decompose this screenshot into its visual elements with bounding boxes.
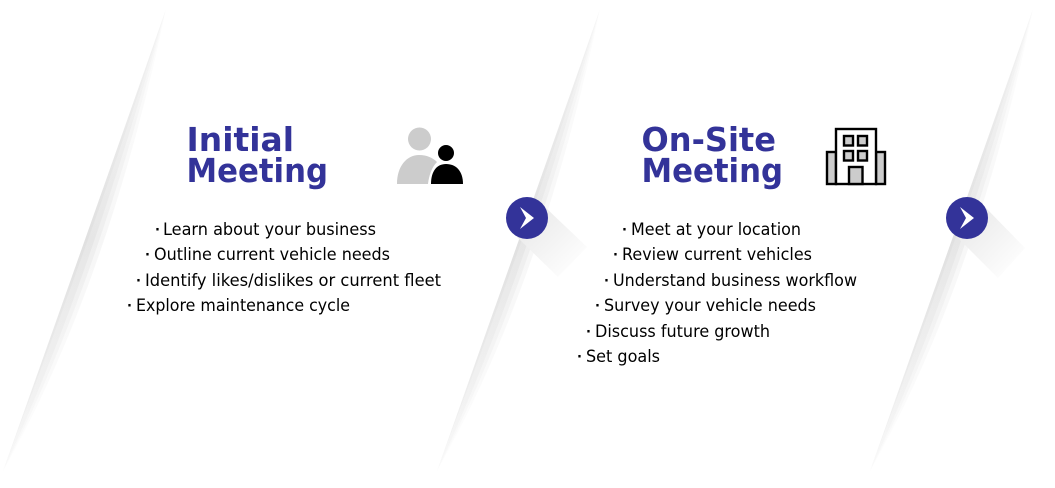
- list item: Review current vehicles: ·: [613, 248, 618, 263]
- list: Initial Meeting tasks: [127, 220, 442, 315]
- list item: Outline current vehicle needs: Outline current vehicle needs: [154, 245, 390, 264]
- list item: Set goals: ·: [577, 350, 582, 365]
- list item: Identify likes/dislikes or current fleet: Identify likes/dislikes or current fleet: [145, 271, 442, 290]
- list item: Explore maintenance cycle: Explore maintenance cycle: [136, 296, 350, 315]
- heading: Initial Meeting: Meeting: [186, 151, 328, 190]
- list item: Set goals: Set goals: [586, 347, 660, 366]
- list item: Understand business workflow: Understand business workflow: [613, 271, 857, 290]
- heading: On-Site Meeting: Meeting: [642, 151, 783, 190]
- decorative streak 1: [3, 9, 166, 471]
- list item: Survey your vehicle needs: Survey your vehicle needs: [604, 296, 816, 315]
- arrow button 2: [946, 197, 1025, 278]
- heading: Initial Meeting: [186, 120, 328, 190]
- heading: On-Site Meeting: On-Site: [642, 120, 776, 159]
- list item: Survey your vehicle needs: ·: [595, 299, 600, 314]
- list item: Outline current vehicle needs: ·: [145, 248, 150, 263]
- list item: Meet at your location: ·: [622, 223, 627, 238]
- icon: two people: [397, 128, 463, 184]
- icon: office building: [827, 129, 885, 184]
- list item: Identify likes/dislikes or current fleet: ·: [136, 274, 141, 289]
- list item: Review current vehicles: Review current vehicles: [622, 245, 812, 264]
- list item: Learn about your business: Learn about your business: [163, 220, 376, 239]
- decorative streak 3: [870, 9, 1033, 471]
- list: On-Site Meeting tasks: [577, 220, 857, 366]
- heading: On-Site Meeting: [642, 120, 783, 190]
- list item: Discuss future growth: ·: [586, 325, 591, 340]
- heading: Initial Meeting: Initial: [186, 120, 294, 159]
- list item: Learn about your business: ·: [155, 223, 160, 238]
- list item: Understand business workflow: ·: [604, 274, 609, 289]
- list item: Explore maintenance cycle: ·: [127, 299, 132, 314]
- list item: Meet at your location: Meet at your location: [631, 220, 801, 239]
- arrow button 1: [506, 197, 587, 277]
- list item: Discuss future growth: Discuss future growth: [595, 322, 770, 341]
- decorative streak 2: [437, 9, 600, 471]
